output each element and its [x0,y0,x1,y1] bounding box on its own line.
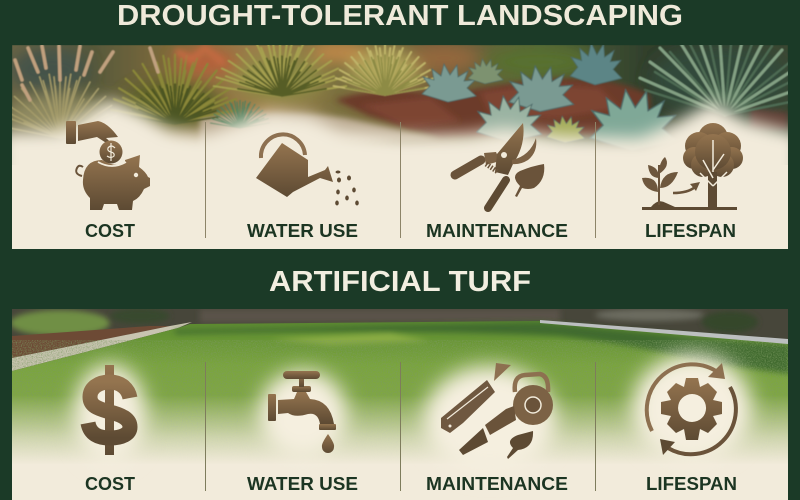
shrubs [10,310,110,336]
panel: artificial turf [10,308,790,500]
label: lifespan (top): LIFESPAN [645,221,736,241]
yucca [640,42,790,115]
label: maintenance (bottom): MAINTENANCE [426,474,568,494]
title: artificial turf: ARTIFICIAL TURF [269,266,531,298]
curb [540,320,788,344]
label: lifespan (bottom): LIFESPAN [646,474,737,494]
icon: water faucet [268,371,336,453]
pampas plumes [15,46,158,100]
photo: turf lawn [10,308,790,500]
icon: gear with circular arrows [647,363,736,455]
fade into cream [12,395,788,465]
mulch bed [335,78,650,138]
cream panel base [12,165,788,250]
divider lines: bottom panel [206,362,596,491]
label: cost (top): COST [85,221,135,241]
walkway [12,322,192,371]
divider lines: top panel [206,122,596,238]
label: water use (bottom): WATER USE [247,474,358,494]
label: cost (bottom): COST [85,474,135,494]
icon: utility knife, leaf blower and leaf [441,363,553,459]
photo: desert garden [12,45,788,148]
icon: dollar sign [88,365,130,455]
icon: piggy bank with coin [66,121,150,210]
turf texture [12,340,788,428]
gravel path [196,111,432,142]
icon: sprout growing into tree [642,123,743,209]
fade into cream [12,90,788,165]
mulch [12,326,170,358]
lawn [12,321,788,460]
ornamental grasses [1,41,436,138]
agaves [422,43,677,151]
panel: drought-tolerant landscaping [12,45,788,249]
icon: pruning shears and leaf [455,123,544,208]
label: water use (top): WATER USE [247,221,358,241]
icon: watering can [256,134,359,206]
label: maintenance (top): MAINTENANCE [426,221,568,241]
lawn shadow [175,322,790,374]
title: drought-tolerant landscaping: DROUGHT-TOLERANT LANDSCAPING [117,0,683,32]
